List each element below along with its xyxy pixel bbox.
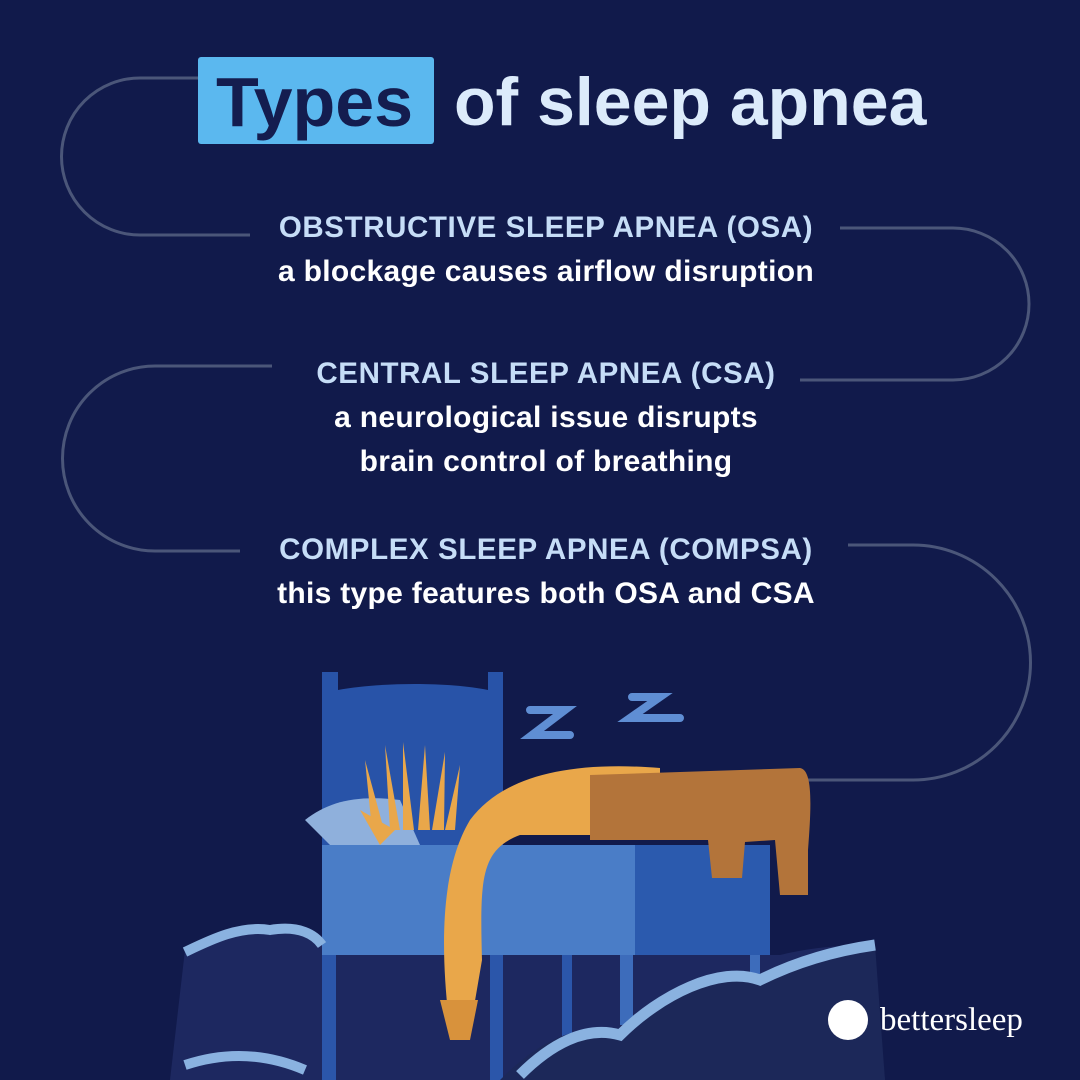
text: CompSA description: this type features both OSA and CSA bbox=[277, 577, 815, 610]
pillow bbox=[305, 798, 420, 845]
heading: CSA: CENTRAL SLEEP APNEA (CSA) bbox=[316, 357, 776, 390]
title: Types bbox=[216, 63, 413, 141]
logo: bettersleep bbox=[828, 1000, 1023, 1040]
text: CSA description: brain control of breathing bbox=[360, 445, 732, 478]
logo: bettersleep: bettersleep bbox=[880, 1002, 1023, 1038]
legs of person bbox=[590, 768, 810, 895]
headboard bbox=[322, 672, 503, 845]
mattress bbox=[322, 845, 770, 955]
title bbox=[198, 57, 927, 144]
cloud outlines bbox=[185, 929, 322, 952]
heading: CompSA: COMPLEX SLEEP APNEA (COMPSA) bbox=[279, 533, 813, 566]
hair bbox=[360, 742, 460, 845]
heading: OSA: OBSTRUCTIVE SLEEP APNEA (OSA) bbox=[279, 211, 813, 244]
text: CSA description: a neurological issue disrupts bbox=[334, 401, 758, 434]
legs bbox=[322, 955, 336, 1080]
title: of sleep apnea bbox=[454, 64, 926, 140]
zzz bbox=[530, 697, 680, 735]
text: CSA description bbox=[334, 401, 758, 478]
arm/body bbox=[444, 766, 660, 1030]
dark cloud under bed bbox=[170, 930, 885, 1080]
text: OSA description: a blockage causes airflow disruption bbox=[278, 255, 814, 288]
